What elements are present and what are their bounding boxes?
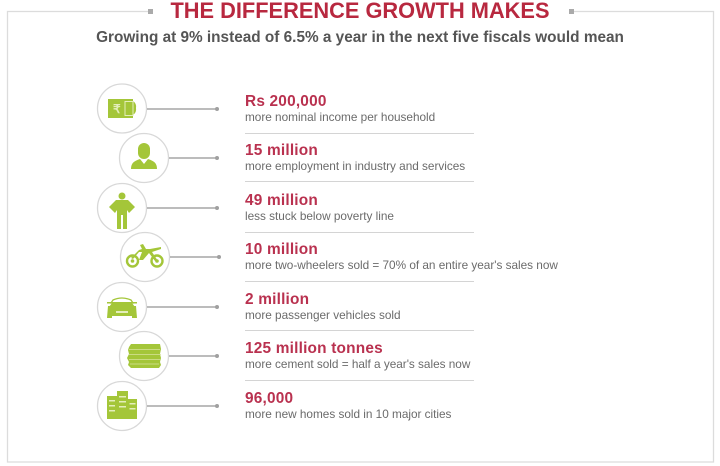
- subtitle: Growing at 9% instead of 6.5% a year in the next five fiscals would mean: [96, 28, 624, 46]
- description: two-wheelers: more two-wheelers sold = 70% of an entire year's sales now: [245, 258, 558, 272]
- stat: cement: 125 million tonnes: [245, 340, 383, 357]
- stat: homes: 96,000: [245, 390, 293, 407]
- description: employment: more employment in industry and services: [245, 159, 465, 173]
- stat: employment: 15 million: [245, 142, 318, 159]
- stat: poverty: 49 million: [245, 192, 318, 209]
- description: homes: more new homes sold in 10 major cities: [245, 407, 451, 421]
- description: poverty: less stuck below poverty line: [245, 209, 394, 223]
- description: passenger vehicles: more passenger vehicles sold: [245, 308, 401, 322]
- description: income: more nominal income per household: [245, 110, 435, 124]
- stat: two-wheelers: 10 million: [245, 241, 318, 258]
- stat: income: Rs 200,000: [245, 93, 327, 110]
- stat: passenger vehicles: 2 million: [245, 291, 309, 308]
- description: cement: more cement sold = half a year's sales now: [245, 357, 470, 371]
- icons and connectors: ₹: [113, 102, 121, 116]
